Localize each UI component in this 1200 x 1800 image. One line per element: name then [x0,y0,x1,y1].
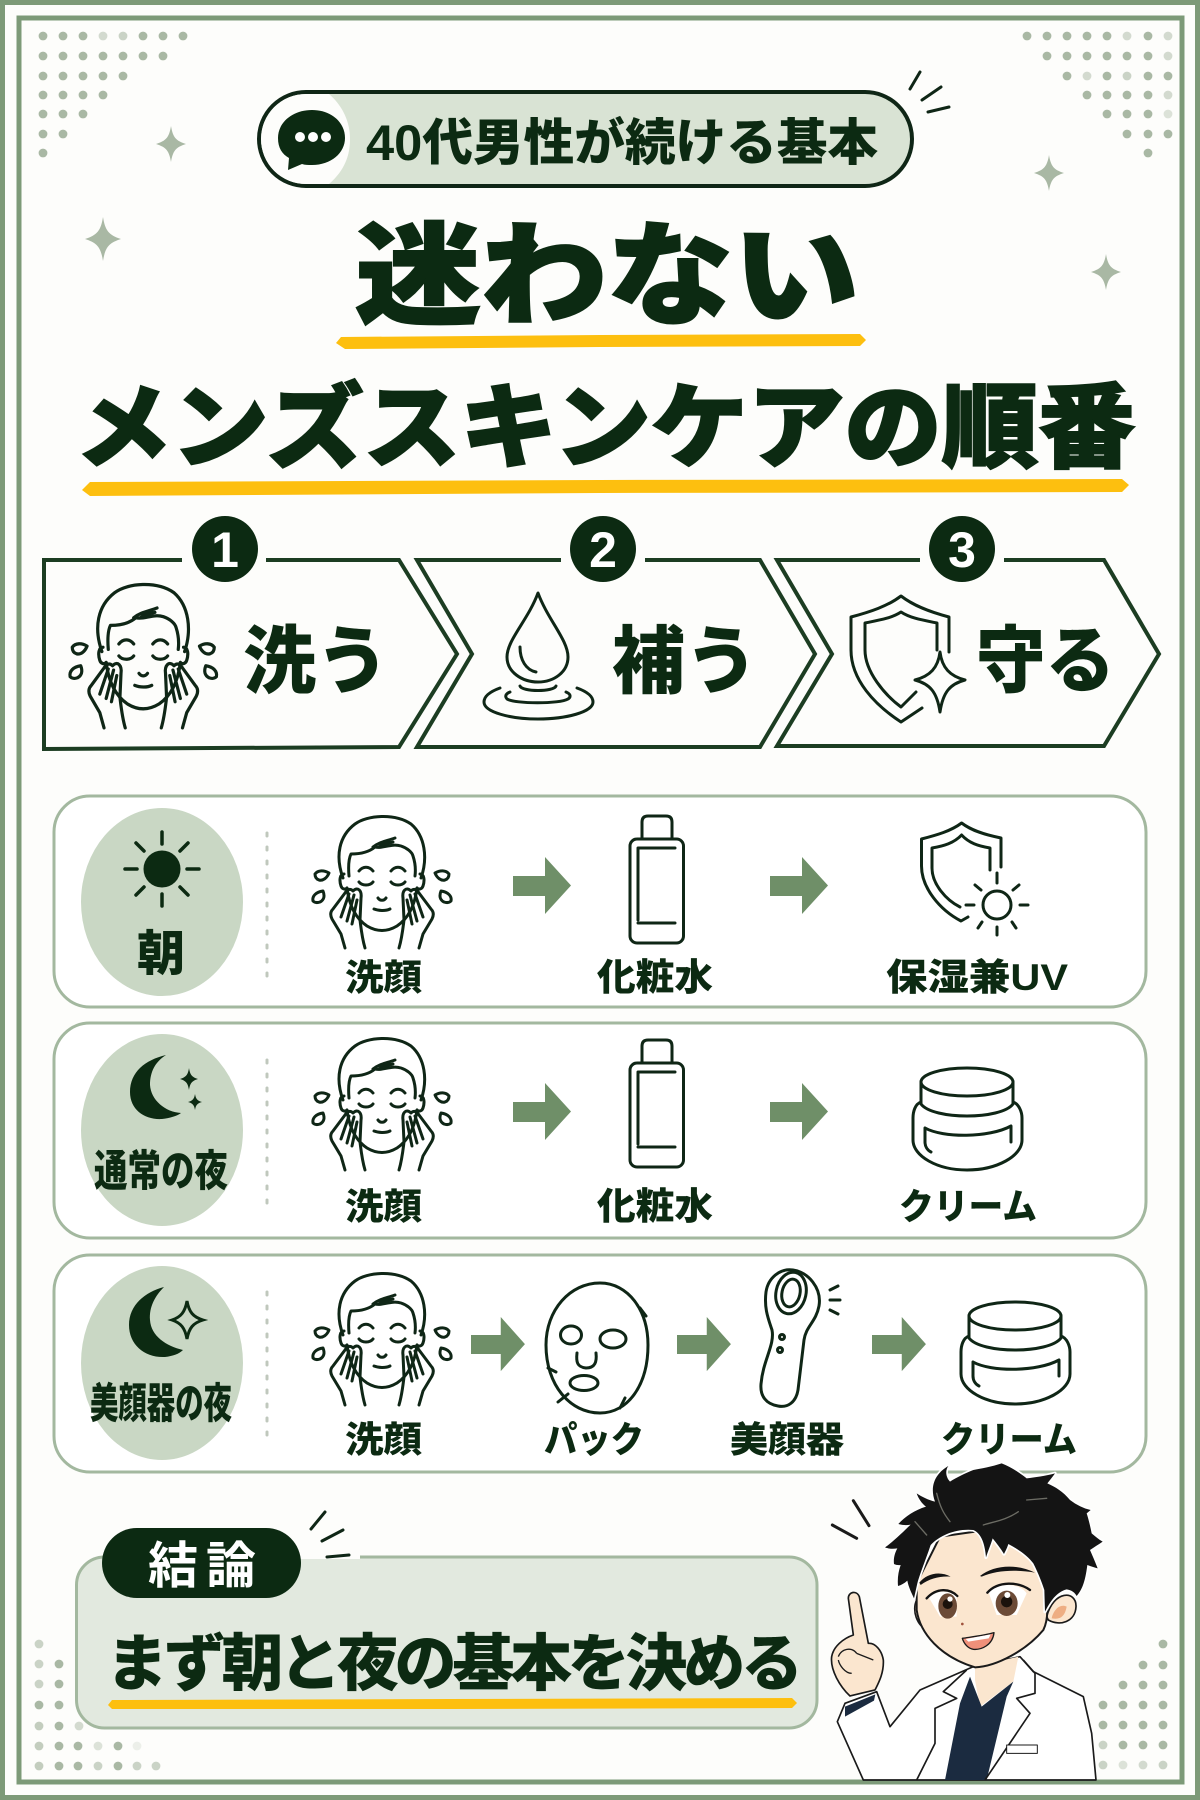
icon: moon and sparkle [129,1287,203,1357]
arrow [513,1083,571,1140]
coat and shirt [837,1657,1096,1780]
conclusion label [102,1528,301,1598]
icon: water drop [484,593,593,719]
arrow [770,1083,828,1140]
step 3 label: 守る [976,621,1115,702]
icon: face washing [70,585,217,728]
badge: morning [81,808,243,996]
character: doctor pointing [831,1463,1103,1780]
arrow [872,1317,926,1371]
step 2 number [570,516,636,582]
title underline 2 [82,479,1129,496]
badge: 40代男性が続ける基本 [259,92,912,186]
step: cream [899,1068,1037,1227]
step: moisturizer with UV: 保湿兼UV [886,957,1068,998]
step: beauty device [730,1269,844,1460]
step 3 number [929,516,995,582]
panel: morning [54,796,1146,1007]
title line 2: メンズスキンケアの順番 [75,378,1135,480]
nose and mouth [961,1623,994,1649]
badge accent rays [910,72,949,112]
step 2 label: 補う [612,620,758,703]
step: face wash [313,1273,451,1460]
arrow [471,1317,525,1371]
ears [915,1595,1076,1630]
step: lotion: 化粧水 [597,1186,713,1227]
step: face wash: 洗顔 [345,1419,422,1460]
conclusion underline [108,1698,797,1709]
step 3 number: 3 [948,522,976,578]
icon: sun [125,832,199,906]
conclusion text: まず朝と夜の基本を決める [106,1630,803,1699]
step 3: 守る [777,516,1159,746]
divider [266,1292,268,1438]
hand [831,1592,883,1696]
label: 朝: 朝 [137,928,185,981]
face [917,1530,1047,1667]
conclusion panel [76,1512,817,1728]
step: cream [941,1302,1077,1460]
conclusion label: 結論 [148,1538,256,1594]
arrow [677,1317,731,1371]
divider [266,1060,268,1207]
dot pattern bottom right [1099,1640,1167,1769]
step 2: 補う [417,516,815,747]
eyebrows and eyes [919,1567,1035,1619]
badge: beauty device night [81,1266,243,1460]
accent rays [832,1501,869,1538]
step 1 label: 洗う [243,620,389,703]
dot pattern top left [39,32,187,157]
step: lotion [597,816,713,998]
step: lotion [597,1040,713,1227]
icon: shield with sparkle [851,596,965,722]
step: sheet mask [544,1283,648,1460]
step: face wash: 洗顔 [345,1186,422,1227]
step: beauty device: 美顔器 [730,1419,844,1460]
step 2 number: 2 [589,522,617,578]
badge: normal night [81,1034,243,1226]
conclusion accent rays [311,1512,349,1557]
step: face wash [313,1038,451,1227]
title underline 1 [336,334,866,349]
title line 1: 迷わない [355,214,859,339]
dot pattern top right [1023,32,1172,157]
divider [266,833,268,978]
hair [885,1463,1103,1612]
dot pattern bottom left [35,1640,160,1770]
step: sheet mask: パック [544,1419,644,1460]
arrow [513,857,571,914]
panel: normal night [54,1023,1146,1238]
step: face wash [313,816,451,998]
step 1: 洗う [44,516,457,749]
badge text: 40代男性が続ける基本 [366,115,878,171]
arrow [770,857,828,914]
step: lotion: 化粧水 [597,957,713,998]
icon: moon and stars [130,1055,202,1119]
sparkles [85,126,1121,290]
step: cream: クリーム [899,1186,1037,1227]
label: 通常の夜: 通常の夜 [94,1148,228,1196]
step 1 number [192,516,258,582]
step 1 number: 1 [211,522,239,578]
panel: beauty device night [54,1255,1146,1472]
icon: speech bubble [278,110,345,170]
label: 美顔器の夜: 美顔器の夜 [90,1380,232,1427]
step: moisturizer with UV [886,823,1068,998]
step: face wash: 洗顔 [345,957,422,998]
step: cream: クリーム [941,1419,1077,1460]
